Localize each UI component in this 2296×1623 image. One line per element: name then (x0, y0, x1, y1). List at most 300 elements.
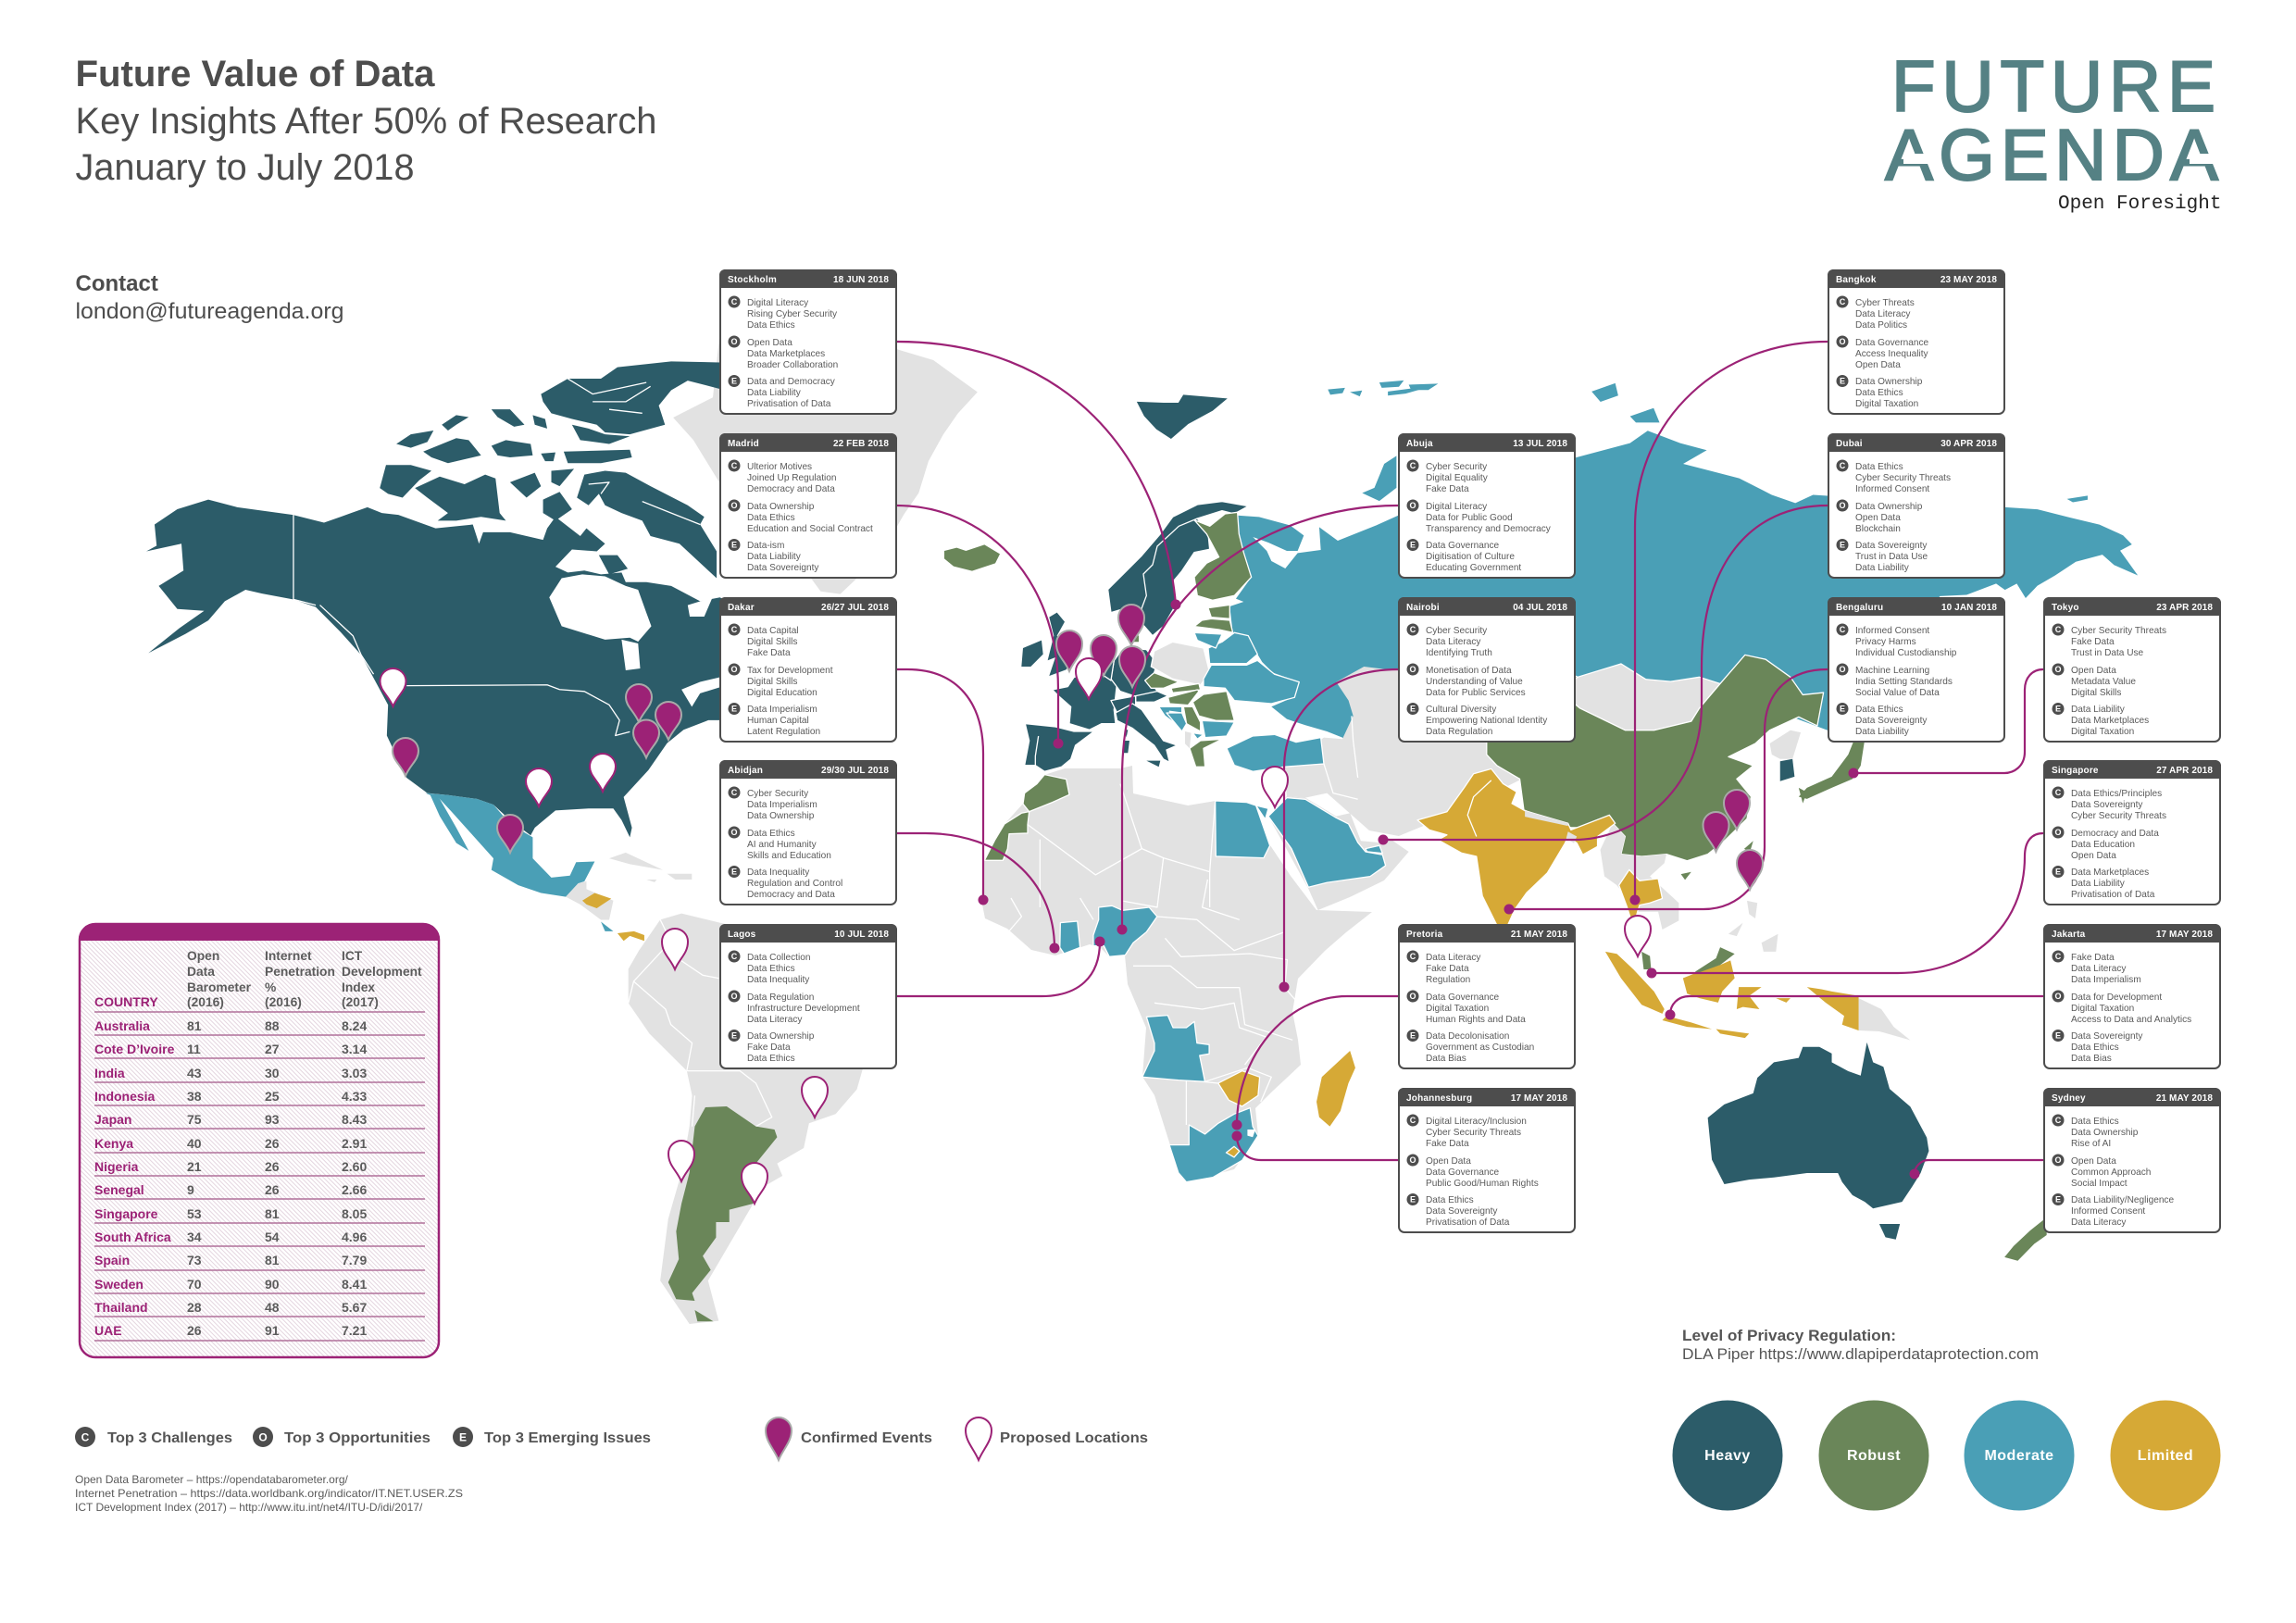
panel: Lagos: Data Collection (747, 953, 810, 963)
table rows: 43 (187, 1066, 202, 1080)
panel: Stockholm: Privatisation of Data (747, 399, 831, 409)
panel: Sydney: C (2055, 1116, 2062, 1125)
panel: Jakarta: C (2055, 952, 2062, 961)
panel: Nairobi: O (1409, 665, 1416, 674)
panel: Bengaluru: Data Sovereignty (1855, 716, 1928, 726)
panel: Singapore: Privatisation of Data (2071, 890, 2155, 900)
proposed pin: Brazil (802, 1077, 828, 1117)
panel: Tokyo: Digital Taxation (2071, 727, 2134, 737)
Asia: China, Mongolia, India and neighbours (1487, 646, 1865, 952)
table rows: 26 (265, 1136, 280, 1151)
table rows: Nigeria (94, 1159, 139, 1174)
table header: COUNTRY (94, 994, 158, 1009)
logo (1885, 45, 2221, 215)
confirmed pin: Mexico City (497, 815, 523, 853)
panel: Lagos: O (730, 992, 738, 1001)
privacy level circles: Limited (2138, 1448, 2193, 1464)
panel: Nairobi: Understanding of Value (1426, 677, 1523, 687)
confirmed pin: Chicago (626, 684, 652, 722)
title: January to July 2018 (76, 147, 415, 188)
panel: Dakar (719, 597, 897, 742)
panel: Madrid (719, 433, 897, 578)
panel: Johannesburg: Digital Literacy/Inclusion (1426, 1117, 1527, 1127)
panel: Madrid: O (730, 501, 738, 510)
table rows: 88 (265, 1018, 280, 1033)
panel: Dakar: Fake Data (747, 648, 791, 658)
table rows: India (94, 1066, 125, 1080)
table header: (2016) (187, 995, 224, 1009)
panel: Bengaluru: Data Liability (1855, 727, 1910, 737)
panel: Abuja: Fake Data (1426, 484, 1469, 494)
panel: Abuja: Abuja (1406, 439, 1433, 449)
panel: Bangkok: Data Politics (1855, 320, 1907, 331)
panel: Lagos: Data Inequality (747, 975, 810, 985)
panel: Stockholm: C (731, 297, 738, 306)
panel: Pretoria: Fake Data (1426, 964, 1469, 974)
panel: Madrid: Joined Up Regulation (747, 473, 837, 483)
panel: Dakar: Dakar (728, 603, 755, 613)
title: Key Insights After 50% of Research (76, 101, 657, 142)
table header: Data (187, 965, 215, 979)
panel: Dubai: E (1840, 541, 1845, 550)
panel: Nairobi: Cultural Diversity (1426, 705, 1497, 715)
contact: london@futureagenda.org (76, 299, 344, 324)
panel: Abuja: 13 JUL 2018 (1513, 439, 1567, 449)
panel: Jakarta: E (2055, 1031, 2061, 1041)
sources (75, 1473, 463, 1514)
table rows: South Africa (94, 1230, 171, 1244)
legend: challenges, opportunities, emerging issues: Top 3 Emerging Issues (484, 1430, 651, 1446)
panel: Dubai: Data Ethics (1855, 462, 1903, 472)
panel: Bangkok: Data Ethics (1855, 388, 1903, 398)
panel: Nairobi: Data for Public Services (1426, 688, 1526, 698)
table rows: 8.43 (342, 1112, 367, 1127)
table rows: 73 (187, 1253, 202, 1267)
confirmed pin: Shanghai (1724, 790, 1750, 830)
panel: Lagos: Data Regulation (747, 993, 814, 1003)
proposed pin: Buenos Aires (742, 1163, 767, 1204)
panel: Abidjan: Data Ownership (747, 811, 815, 821)
table rows: 9 (187, 1182, 194, 1197)
panel: Bangkok: Data Ownership (1855, 377, 1923, 387)
table rows: 7.21 (342, 1323, 367, 1338)
panel: Nairobi: Identifying Truth (1426, 648, 1492, 658)
panel: Bangkok: Data Governance (1855, 338, 1929, 348)
table rows: 26 (265, 1159, 280, 1174)
panel: Bangkok: O (1839, 337, 1846, 346)
table rows: 2.66 (342, 1182, 367, 1197)
table rows: 8.41 (342, 1277, 367, 1292)
table rows: 81 (265, 1253, 280, 1267)
panel: Nairobi: Empowering National Identity (1426, 716, 1548, 726)
panel: Lagos: E (731, 1031, 737, 1041)
panel: Dakar: Human Capital (747, 716, 809, 726)
panel: Dubai: Open Data (1855, 513, 1901, 523)
panel: Abuja: Data for Public Good (1426, 513, 1513, 523)
table rows: 7.79 (342, 1253, 367, 1267)
table rows: Indonesia (94, 1089, 156, 1104)
table header: % (265, 980, 276, 994)
panel: Abidjan: Regulation and Control (747, 879, 842, 889)
panel: Stockholm: Broader Collaboration (747, 360, 838, 370)
panel: Abidjan: Democracy and Data (747, 890, 835, 900)
panel: Dubai: Data Sovereignty (1855, 541, 1928, 551)
panel: Tokyo: 23 APR 2018 (2156, 603, 2213, 613)
table rows: 8.05 (342, 1206, 367, 1221)
table rows: 3.03 (342, 1066, 367, 1080)
table rows: 53 (187, 1206, 202, 1221)
panel: Tokyo: Tokyo (2052, 603, 2079, 613)
panel: Stockholm: Digital Literacy (747, 298, 809, 308)
panel: Madrid: Education and Social Contract (747, 524, 873, 534)
panel: Dakar: Digital Education (747, 688, 817, 698)
panel: Pretoria: E (1410, 1031, 1416, 1041)
table rows: 3.14 (342, 1042, 367, 1056)
panel: Singapore: 27 APR 2018 (2156, 766, 2213, 776)
table rows: 38 (187, 1089, 202, 1104)
map pins (380, 605, 1763, 1204)
panel: Nairobi: Data Literacy (1426, 637, 1481, 647)
table rows: 30 (265, 1066, 280, 1080)
panel: Singapore: C (2055, 788, 2062, 797)
panel: Dubai: Data Liability (1855, 563, 1910, 573)
data table (79, 924, 440, 1357)
confirmed pin: Copenhagen (1118, 605, 1144, 645)
table header: (2017) (342, 995, 379, 1009)
panel: Abidjan: Abidjan (728, 766, 763, 776)
panel: Lagos: Lagos (728, 930, 756, 940)
panel: Pretoria (1398, 924, 1576, 1068)
panel: Sydney: Data Ethics (2071, 1117, 2119, 1127)
legend: challenges, opportunities, emerging issues (75, 1427, 651, 1447)
panel: Bangkok: Cyber Threats (1855, 298, 1915, 308)
table rows: 21 (187, 1159, 202, 1174)
table header: (2016) (265, 995, 302, 1009)
panel: Jakarta: Data Ethics (2071, 1042, 2119, 1053)
African borders (1028, 784, 1216, 907)
panel: Singapore: Open Data (2071, 851, 2116, 861)
panel: Nairobi: E (1410, 705, 1416, 714)
panel: Jakarta: 17 MAY 2018 (2156, 930, 2213, 940)
panel: Singapore: Data Sovereignty (2071, 800, 2143, 810)
panel: Sydney: Data Literacy (2071, 1217, 2127, 1228)
panel: Dakar: Data Capital (747, 626, 799, 636)
table rows: 93 (265, 1112, 280, 1127)
panel: Nairobi: Nairobi (1406, 603, 1440, 613)
Svalbard (1137, 394, 1228, 439)
table rows: 81 (265, 1206, 280, 1221)
privacy level circles: Moderate (1984, 1448, 2054, 1464)
table rows: 75 (187, 1112, 202, 1127)
panel: Tokyo: E (2055, 705, 2061, 714)
panel: Singapore: Singapore (2052, 766, 2099, 776)
legend: challenges, opportunities, emerging issues: E (459, 1431, 467, 1444)
contact: Contact (76, 271, 158, 296)
panel: Madrid: Data Sovereignty (747, 563, 819, 573)
panel: Sydney: O (2054, 1155, 2062, 1165)
panel: Bangkok: Data Literacy (1855, 309, 1911, 319)
panel: Dakar: O (730, 665, 738, 674)
confirmed pin: Berlin (1119, 646, 1145, 687)
panel: Bangkok: Open Data (1855, 360, 1901, 370)
proposed pin: Vancouver (380, 668, 406, 706)
Europe (944, 502, 1299, 771)
panel: Singapore: E (2055, 868, 2061, 877)
panel: Sydney: Sydney (2052, 1093, 2086, 1104)
South America (629, 914, 883, 1324)
table rows: 27 (265, 1042, 280, 1056)
event location dots (978, 600, 1920, 1180)
confirmed pin: Hong Kong (1703, 812, 1729, 852)
panel: Stockholm: E (731, 377, 737, 386)
panel: Dubai: Informed Consent (1855, 484, 1929, 494)
world map (146, 312, 2138, 1324)
panel: Sydney: Data Liability/Negligence (2071, 1195, 2174, 1205)
panel: Johannesburg: Data Governance (1426, 1167, 1500, 1178)
table rows: 70 (187, 1277, 202, 1292)
panel: Dakar: Digital Skills (747, 637, 797, 647)
confirmed pin: New York (655, 702, 681, 740)
legend: challenges, opportunities, emerging issues: Top 3 Challenges (107, 1430, 232, 1446)
panel: Johannesburg: C (1410, 1116, 1416, 1125)
proposed pin: Atlanta (590, 754, 616, 792)
table rules (94, 1012, 425, 1341)
panel: Abuja: Digital Equality (1426, 473, 1489, 483)
table rows: UAE (94, 1323, 122, 1338)
panel: Jakarta: Fake Data (2071, 953, 2115, 963)
panel: Dakar: Tax for Development (747, 666, 833, 676)
panel: Nairobi: Cyber Security (1426, 626, 1488, 636)
panel: Bangkok: C (1840, 297, 1846, 306)
panel: Bengaluru: India Setting Standards (1855, 677, 1953, 687)
panel: Tokyo: O (2054, 665, 2062, 674)
logo: FUTURE (1891, 45, 2215, 127)
Canadian inlets, Hudson Bay and borders (293, 379, 725, 735)
table rows: 8.24 (342, 1018, 367, 1033)
panel: Lagos: Infrastructure Development (747, 1004, 860, 1014)
table rows: Sweden (94, 1277, 144, 1292)
panel: Abidjan: Cyber Security (747, 789, 809, 799)
table rows: 90 (265, 1277, 280, 1292)
privacy regulation heading: DLA Piper https://www.dlapiperdataprotection.com (1682, 1346, 2039, 1363)
panel: Dubai: Trust in Data Use (1855, 552, 1928, 562)
panel: Pretoria: Pretoria (1406, 930, 1443, 940)
panel: Singapore: Data Education (2071, 840, 2135, 850)
panel: Abuja: Data Governance (1426, 541, 1500, 551)
panel: Nairobi: Monetisation of Data (1426, 666, 1512, 676)
panel: Lagos: 10 JUL 2018 (834, 930, 889, 940)
panel: Abidjan: Data Inequality (747, 868, 810, 878)
confirmed pin: Brussels (1091, 635, 1117, 676)
panel: Stockholm: 18 JUN 2018 (833, 275, 889, 285)
Greenland (673, 312, 978, 594)
confirmed pin: Manila (1737, 850, 1763, 890)
panel: Sydney: Rise of AI (2071, 1139, 2111, 1149)
panel: Jakarta: Data Literacy (2071, 964, 2127, 974)
legend: pins: Proposed Locations (1000, 1430, 1148, 1446)
sources: Internet Penetration – https://data.worldbank.org/indicator/IT.NET.USER.ZS (75, 1487, 463, 1500)
panel: Johannesburg: Data Ethics (1426, 1195, 1474, 1205)
panel: Sydney: E (2055, 1195, 2061, 1205)
table rows: 91 (265, 1323, 280, 1338)
panel: Abidjan: Skills and Education (747, 851, 831, 861)
panel: Tokyo: Data Marketplaces (2071, 716, 2149, 726)
panel: Pretoria: Regulation (1426, 975, 1470, 985)
legend: challenges, opportunities, emerging issues: C (81, 1431, 90, 1444)
panel: Singapore: Data Marketplaces (2071, 868, 2149, 878)
panel: Abuja: Digital Literacy (1426, 502, 1488, 512)
table rows: Thailand (94, 1300, 148, 1315)
table header: Development (342, 965, 422, 979)
panel: Bengaluru: Bengaluru (1836, 603, 1883, 613)
panel: Dubai: O (1839, 501, 1846, 510)
privacy regulation heading: Level of Privacy Regulation: (1682, 1328, 1896, 1344)
panel: Singapore: O (2054, 828, 2062, 837)
panel: Stockholm: Stockholm (728, 275, 777, 285)
panel: Singapore: Data Ethics/Principles (2071, 789, 2162, 799)
panel: Tokyo: Cyber Security Threats (2071, 626, 2166, 636)
panel: Bangkok: E (1840, 377, 1845, 386)
panel: Bangkok: Bangkok (1836, 275, 1877, 285)
panel: Dakar: Digital Skills (747, 677, 797, 687)
sources: ICT Development Index (2017) – http://www.itu.int/net4/ITU-D/idi/2017/ (75, 1501, 423, 1514)
North America: Canada, USA, Alaska (146, 361, 762, 837)
panel: Lagos: Fake Data (747, 1042, 791, 1053)
panel: Bengaluru: O (1839, 665, 1846, 674)
panel: Pretoria: O (1409, 992, 1416, 1001)
table rows: 26 (187, 1323, 202, 1338)
panel: Johannesburg: Johannesburg (1406, 1093, 1472, 1104)
table rows: Japan (94, 1112, 131, 1127)
panel: Johannesburg: Open Data (1426, 1156, 1471, 1167)
panel: Tokyo: Open Data (2071, 666, 2116, 676)
panel: Stockholm: Data Liability (747, 388, 802, 398)
panel: Abuja: E (1410, 541, 1416, 550)
table rows: 40 (187, 1136, 202, 1151)
panel: Stockholm: Data Ethics (747, 320, 795, 331)
panel: Lagos: Data Ownership (747, 1031, 815, 1042)
panel: Madrid: Data Liability (747, 552, 802, 562)
panel: Bengaluru: E (1840, 705, 1845, 714)
panel: Nairobi: 04 JUL 2018 (1513, 603, 1567, 613)
Africa (981, 766, 1372, 1182)
panel: Madrid: E (731, 541, 737, 550)
table rows: 11 (187, 1042, 201, 1056)
panel: Abidjan: AI and Humanity (747, 840, 817, 850)
privacy level circles: Robust (1847, 1448, 1901, 1464)
panel: Abidjan: 29/30 JUL 2018 (821, 766, 889, 776)
panel: Sydney (2043, 1088, 2221, 1232)
panel: Pretoria: Government as Custodian (1426, 1042, 1534, 1053)
panel: Lagos: Data Literacy (747, 1015, 803, 1025)
table rows: 54 (265, 1230, 280, 1244)
sources: Open Data Barometer – https://opendatabarometer.org/ (75, 1473, 349, 1486)
panel: Dakar: E (731, 705, 737, 714)
panel: Dubai: Cyber Security Threats (1855, 473, 1951, 483)
panel: Abidjan: C (731, 788, 738, 797)
panel: Nairobi: C (1410, 625, 1416, 634)
panel: Bangkok (1828, 269, 2005, 414)
legend: challenges, opportunities, emerging issues: Top 3 Opportunities (284, 1430, 430, 1446)
panel: Madrid: Data-ism (747, 541, 784, 551)
panel: Madrid: Ulterior Motives (747, 462, 812, 472)
panel: Bangkok: 23 MAY 2018 (1940, 275, 1997, 285)
proposed pin: Colombia (662, 929, 688, 969)
panel: Abuja: Cyber Security (1426, 462, 1488, 472)
panel: Johannesburg: E (1410, 1195, 1416, 1205)
panel: Abidjan: O (730, 828, 738, 837)
legend: pins (766, 1417, 1148, 1460)
panel: Tokyo: C (2055, 625, 2062, 634)
panel: Singapore (2043, 760, 2221, 905)
connector lines (897, 342, 2043, 1174)
panel: Sydney: Informed Consent (2071, 1206, 2145, 1217)
panel: Abuja: Educating Government (1426, 563, 1521, 573)
table rows: 48 (265, 1300, 280, 1315)
panel: Nairobi: Data Regulation (1426, 727, 1492, 737)
legend: pins: Confirmed Events (801, 1430, 932, 1446)
panel: Singapore: Cyber Security Threats (2071, 811, 2166, 821)
panel: Bengaluru: Social Value of Data (1855, 688, 1940, 698)
panel: Jakarta: Data Bias (2071, 1054, 2112, 1064)
panel: Abuja: Transparency and Democracy (1426, 524, 1552, 534)
panel: Jakarta: Data Sovereignty (2071, 1031, 2143, 1042)
Central Asia and Iran (1284, 667, 1574, 836)
table rows: Kenya (94, 1136, 133, 1151)
legend: challenges, opportunities, emerging issues: O (258, 1431, 268, 1444)
panel: Madrid: Data Ownership (747, 502, 815, 512)
panel: Abuja: C (1410, 461, 1416, 470)
panel: Tokyo: Data Liability (2071, 705, 2126, 715)
panel: Sydney: 21 MAY 2018 (2156, 1093, 2213, 1104)
panel: Abuja (1398, 433, 1576, 578)
panel: Bengaluru (1828, 597, 2005, 742)
panel: Dubai: Dubai (1836, 439, 1863, 449)
panel: Jakarta: Digital Taxation (2071, 1004, 2134, 1014)
panel: Stockholm: Rising Cyber Security (747, 309, 838, 319)
panel: Jakarta (2043, 924, 2221, 1068)
panel: Stockholm: Data and Democracy (747, 377, 836, 387)
table header: Internet (265, 949, 312, 963)
table rows (94, 1018, 367, 1338)
table rows: 4.96 (342, 1230, 367, 1244)
Central America and Caribbean (566, 853, 692, 919)
panel: Jakarta: Jakarta (2052, 930, 2086, 940)
panel: Pretoria: Human Rights and Data (1426, 1015, 1526, 1025)
panel: Dubai: Data Ownership (1855, 502, 1923, 512)
proposed pin: Kuala Lumpur (1625, 916, 1651, 956)
panel: Abuja: Digitisation of Culture (1426, 552, 1515, 562)
panel: Tokyo: Metadata Value (2071, 677, 2136, 687)
panel: Sydney: Open Data (2071, 1156, 2116, 1167)
proposed pin: Texas (526, 768, 552, 806)
panel: Dakar: 26/27 JUL 2018 (821, 603, 889, 613)
panel: Madrid: Madrid (728, 439, 759, 449)
table header: Barometer (187, 980, 252, 994)
table rows: 28 (187, 1300, 202, 1315)
table rows: 81 (187, 1018, 202, 1033)
table rows: Spain (94, 1253, 130, 1267)
Russia (1229, 381, 2138, 753)
table rows: Cote D’Ivoire (94, 1042, 175, 1056)
panel: Tokyo: Trust in Data Use (2071, 648, 2144, 658)
panel: Pretoria: Data Literacy (1426, 953, 1481, 963)
panel: Lagos: C (731, 952, 738, 961)
panel: Madrid: 22 FEB 2018 (833, 439, 889, 449)
panel: Pretoria: Data Decolonisation (1426, 1031, 1509, 1042)
panel: Jakarta: Data for Development (2071, 993, 2162, 1003)
panel: Nairobi (1398, 597, 1576, 742)
